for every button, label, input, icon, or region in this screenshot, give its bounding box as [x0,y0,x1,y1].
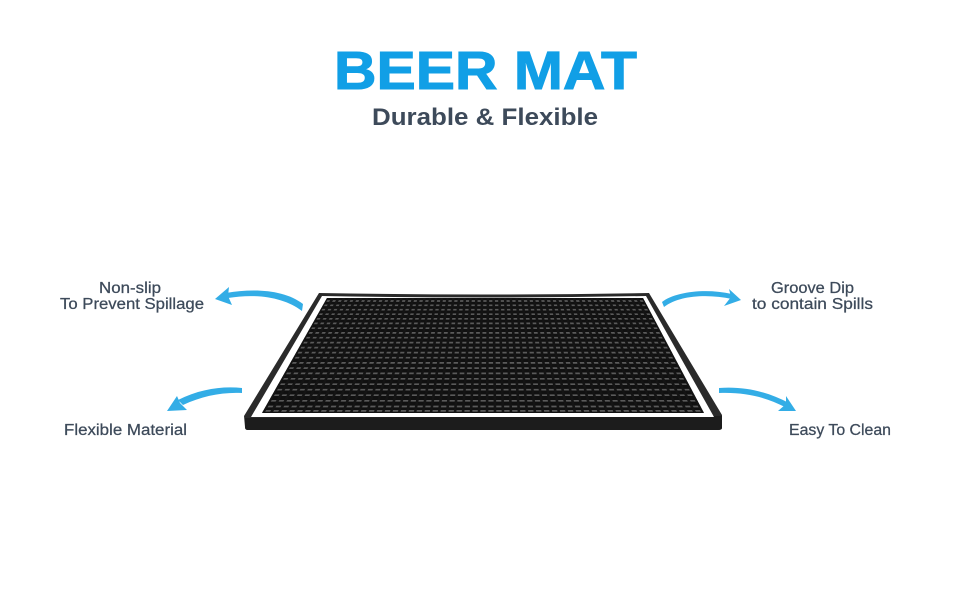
label: groove dip: to contain Spills [752,296,873,313]
beer mat [244,293,722,430]
label: non-slip: To Prevent Spillage [60,296,204,313]
label: flexible material: Flexible Material [64,422,187,439]
subtitle: Durable & Flexible [372,104,598,131]
title: BEER MAT [334,41,637,101]
label: groove dip: Groove Dip [771,280,854,297]
label: non-slip: Non-slip [99,280,161,297]
label: easy to clean: Easy To Clean [789,422,891,439]
